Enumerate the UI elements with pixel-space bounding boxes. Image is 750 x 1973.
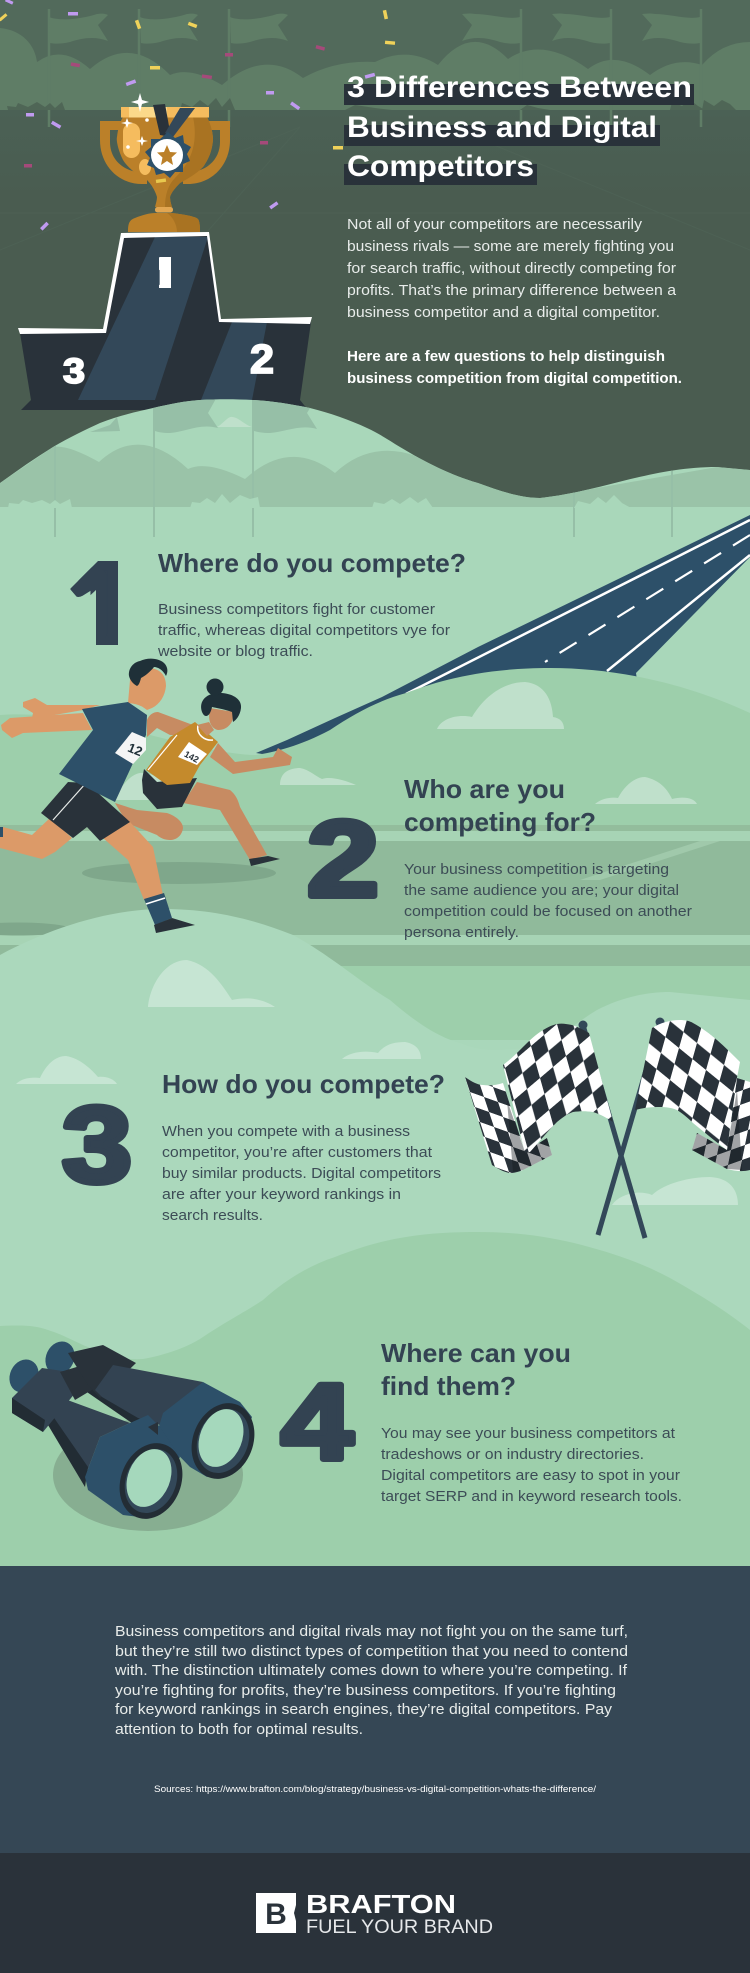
text block 3: competitor, you’re after customers that: [162, 1144, 433, 1161]
podium numbers: [62, 257, 274, 384]
icon: sparkles: [121, 93, 149, 149]
text block 2: the same audience you are; your digital: [404, 882, 679, 899]
flag left: [465, 1024, 613, 1173]
text block 3: When you compete with a business: [162, 1123, 410, 1140]
text block 4: You may see your business competitors at: [381, 1425, 676, 1442]
text block 4: tradeshows or on industry directories.: [381, 1446, 644, 1463]
logo: B: [265, 1898, 287, 1931]
intro text: business rivals — some are merely fighting you: [347, 238, 674, 255]
icon: winners podium: [18, 232, 312, 410]
text block 3: search results.: [162, 1207, 263, 1224]
illustration: road: [256, 515, 750, 760]
logo: [256, 1889, 493, 1938]
flag right: [635, 1020, 750, 1171]
panel: hero background: [0, 0, 750, 560]
conclusion text: [114, 1623, 628, 1738]
panel: green hill behind runners: [0, 668, 750, 1040]
heading 2: [404, 774, 596, 837]
illustration: checkered flags: [465, 1018, 750, 1238]
illustration: runners: [0, 659, 292, 933]
confetti: [0, 0, 395, 231]
podium numbers: 1: [151, 248, 179, 304]
heading 4: [381, 1338, 571, 1401]
conclusion text: with. The distinction ultimately comes down to where you’re competing. If: [114, 1662, 628, 1679]
heading 3: How do you compete?: [162, 1069, 445, 1099]
conclusion text: you’re fighting for profits, they’re business competitors. If you’re fighting: [115, 1682, 616, 1699]
text block 1: Business competitors fight for customer: [158, 601, 435, 618]
text block 1: website or blog traffic.: [157, 643, 313, 660]
runner shadows: [0, 862, 276, 936]
podium numbers: 3: [63, 352, 85, 391]
text block 2: competition could be focused on another: [404, 903, 692, 920]
text block 1: [157, 601, 450, 660]
intro text: business competitor and a digital competitor.: [347, 304, 660, 321]
illustration: binoculars: [4, 1337, 265, 1531]
panel: mint field with hill: [0, 399, 750, 1050]
section 3: [62, 1069, 445, 1224]
heading 2: Who are you: [404, 774, 565, 804]
title: Competitors: [347, 150, 534, 183]
text block 2: Your business competition is targeting: [404, 861, 669, 878]
conclusion text: Business competitors and digital rivals may not fight you on the same turf,: [115, 1623, 628, 1640]
section 1: [70, 553, 464, 659]
runner: woman: 142: [183, 749, 201, 765]
text block 3: [162, 1123, 441, 1224]
number 4: 4: [281, 1361, 353, 1482]
number 1: 1: [70, 536, 138, 672]
title: [344, 71, 694, 185]
text block 1: traffic, whereas digital competitors vye for: [158, 622, 450, 639]
intro text: profits. That’s the primary difference between a: [347, 282, 677, 299]
text block 2: persona entirely.: [404, 924, 519, 941]
text block 3: are after your keyword rankings in: [162, 1186, 401, 1203]
heading 4: Where can you: [381, 1338, 571, 1368]
conclusion text: but they’re still two distinct types of competition that you need to contend: [115, 1643, 628, 1660]
intro text: Here are a few questions to help distinguish: [347, 348, 665, 365]
text block 3: buy similar products. Digital competitors: [162, 1165, 441, 1182]
number 2: 2: [307, 798, 379, 919]
text block 4: Digital competitors are easy to spot in your: [381, 1467, 680, 1484]
logo: FUEL YOUR BRAND: [306, 1917, 493, 1938]
number 3: 3: [62, 1084, 132, 1205]
background: stadium bushes and flags: [0, 9, 750, 127]
conclusion text: attention to both for optimal results.: [115, 1721, 363, 1738]
runner: man: 12: [126, 740, 145, 759]
section 4: [281, 1338, 682, 1505]
section 2: [307, 774, 692, 941]
conclusion text: for keyword rankings in search engines, they’re digital competitors. Pay: [115, 1701, 613, 1718]
logo: BRAFTON: [306, 1889, 456, 1919]
panel: conclusion: [0, 1566, 750, 1854]
heading 4: find them?: [381, 1371, 516, 1401]
title: 3 Differences Between: [347, 71, 692, 104]
heading 2: competing for?: [404, 807, 596, 837]
intro text: business competition from digital competition.: [347, 370, 682, 387]
panel: green hill section 4: [0, 1232, 750, 1570]
icon: trophy: [100, 93, 230, 232]
runner: woman: [115, 678, 292, 866]
sources: Sources: https://www.brafton.com/blog/strategy/business-vs-digital-competition-whats-the-difference/: [154, 1784, 597, 1794]
intro text: [347, 216, 682, 387]
intro text: for search traffic, without directly competing for: [347, 260, 676, 277]
panel: mint hill with section 3: [0, 909, 750, 1400]
podium numbers: 2: [250, 336, 274, 382]
icon: medal: [145, 104, 195, 178]
text block 4: target SERP and in keyword research tools.: [381, 1488, 682, 1505]
panel: footer: [0, 1853, 750, 1973]
intro text: Not all of your competitors are necessarily: [347, 216, 643, 233]
clouds in green hill: [112, 682, 697, 804]
text block 2: [404, 861, 692, 941]
text block 4: [381, 1425, 682, 1505]
heading 1: Where do you compete?: [158, 548, 466, 578]
runner: man: [0, 659, 195, 933]
title: Business and Digital: [347, 111, 657, 144]
